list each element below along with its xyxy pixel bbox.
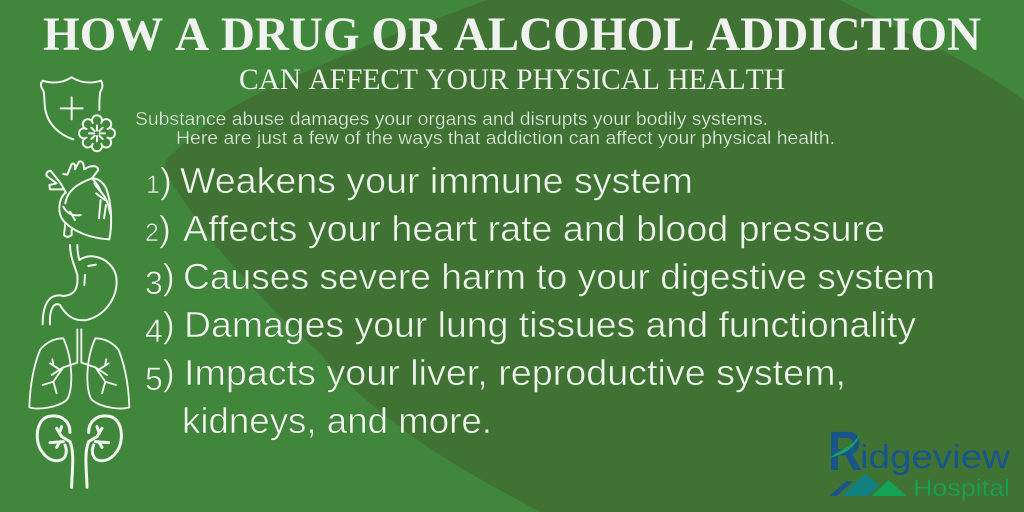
item 3: Causes severe harm to your digestive system — [183, 256, 935, 297]
number 5: 5 — [145, 361, 163, 397]
item 5: Impacts your liver, reproductive system, — [184, 352, 846, 393]
logo wordmark: Ridgeview: idgeview — [860, 438, 1010, 475]
title: HOW A DRUG OR ALCOHOL ADDICTION — [43, 8, 981, 61]
subtitle: CAN AFFECT YOUR PHYSICAL HEALTH — [239, 63, 785, 96]
logo wordmark: Hospital: Hospital — [913, 475, 1010, 502]
number 2: 2) — [145, 208, 171, 249]
logo mountains — [829, 473, 907, 496]
icon: stomach — [43, 245, 117, 324]
logo swoosh — [830, 434, 860, 458]
item 1: Weakens your immune system — [180, 160, 693, 201]
icon: kidneys — [37, 416, 121, 487]
icon: shield with virus — [41, 77, 115, 151]
item 5 continuation: kidneys, and more. — [182, 400, 492, 441]
logo wordmark: Ridgeview: R — [828, 419, 862, 482]
number 3: 3 — [145, 265, 163, 301]
number 5: ) — [163, 352, 175, 393]
intro text: Substance abuse damages your organs and disrupts your bodily systems. — [135, 109, 768, 129]
intro text — [135, 109, 835, 148]
icon: heart — [46, 161, 111, 239]
logo: Ridgeview Hospital — [828, 419, 1010, 502]
item 2: Affects your heart rate and blood pressure — [183, 208, 885, 249]
number 1: 1) — [146, 160, 172, 201]
number 4: 4 — [145, 313, 163, 349]
number 3: ) — [163, 256, 175, 297]
intro text: Here are just a few of the ways that addiction can affect your physical health. — [176, 128, 835, 148]
numbered list of health effects — [145, 160, 935, 441]
item 4: Damages your lung tissues and functionality — [184, 304, 916, 345]
icon: lungs — [29, 329, 129, 408]
number 4: ) — [163, 304, 175, 345]
